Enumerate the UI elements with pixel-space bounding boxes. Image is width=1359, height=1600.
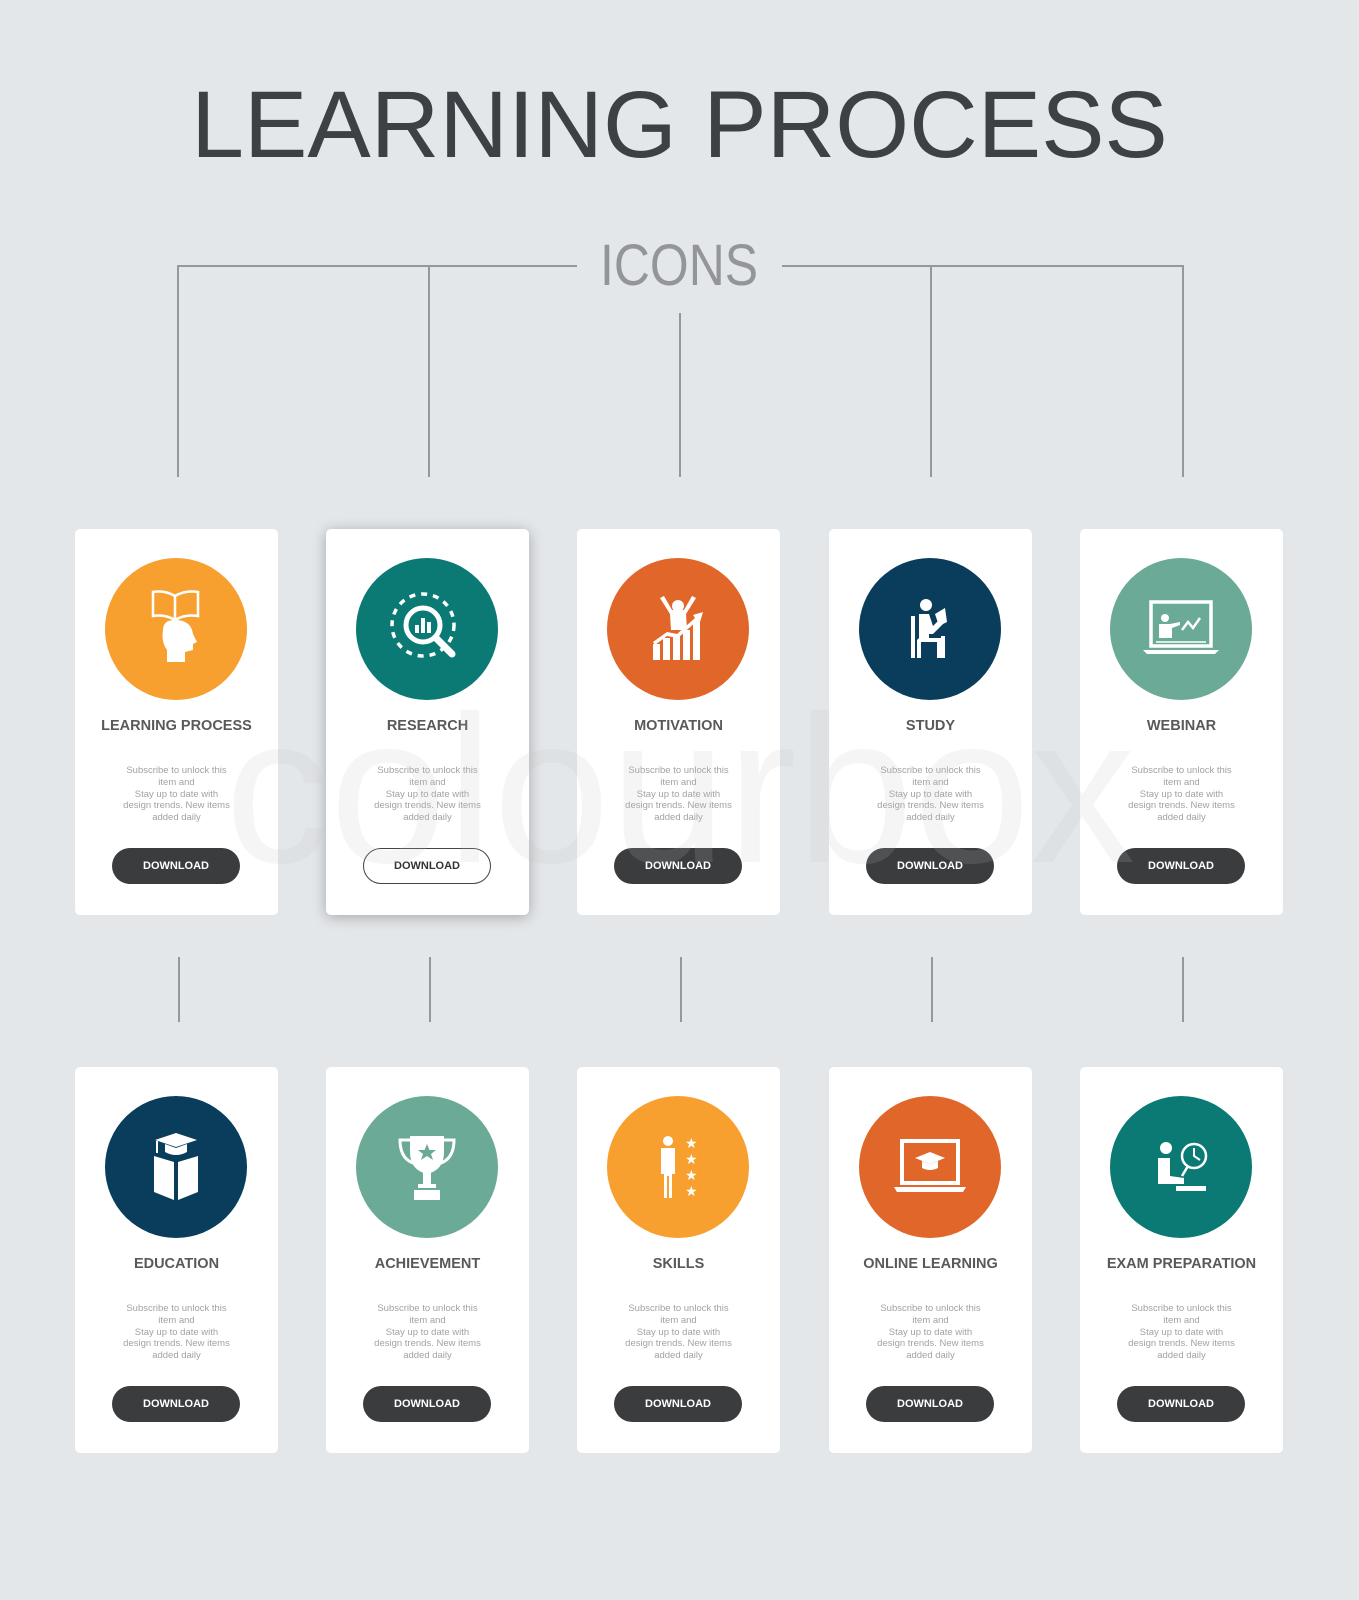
title: LEARNING PROCESS bbox=[191, 72, 1168, 178]
description: Subscribe to unlock this bbox=[1131, 1303, 1232, 1314]
icon: magnifier chart bbox=[356, 558, 498, 700]
card: exam preparation bbox=[1080, 1067, 1283, 1453]
button: DOWNLOAD bbox=[897, 1398, 963, 1410]
description: item and bbox=[660, 777, 697, 788]
card: research bbox=[326, 529, 529, 915]
description: design trends. New items bbox=[625, 1338, 732, 1349]
description: added daily bbox=[403, 1350, 452, 1361]
button bbox=[614, 848, 742, 884]
button bbox=[1117, 848, 1245, 884]
label: ACHIEVEMENT bbox=[375, 1256, 480, 1272]
button: DOWNLOAD bbox=[645, 1398, 711, 1410]
card: education bbox=[75, 1067, 278, 1453]
description bbox=[625, 1303, 732, 1361]
button bbox=[363, 1386, 491, 1422]
description: Stay up to date with bbox=[135, 789, 218, 800]
icon: person sitting reading bbox=[859, 558, 1001, 700]
card: online learning bbox=[829, 1067, 1032, 1453]
button bbox=[112, 848, 240, 884]
icon: book with graduation cap bbox=[105, 1096, 247, 1238]
description: item and bbox=[409, 1315, 446, 1326]
label: LEARNING PROCESS bbox=[101, 718, 252, 734]
description: design trends. New items bbox=[1128, 800, 1235, 811]
description: design trends. New items bbox=[625, 800, 732, 811]
label: WEBINAR bbox=[1147, 718, 1216, 734]
description: item and bbox=[1163, 777, 1200, 788]
button bbox=[866, 1386, 994, 1422]
label: EXAM PREPARATION bbox=[1107, 1256, 1256, 1272]
button: DOWNLOAD bbox=[897, 860, 963, 872]
description: Subscribe to unlock this bbox=[1131, 765, 1232, 776]
icon: laptop presentation bbox=[1110, 558, 1252, 700]
description: item and bbox=[1163, 1315, 1200, 1326]
description bbox=[123, 765, 230, 823]
description: item and bbox=[158, 777, 195, 788]
description: design trends. New items bbox=[123, 800, 230, 811]
button: DOWNLOAD bbox=[645, 860, 711, 872]
watermark: colourbox bbox=[225, 672, 1135, 907]
button bbox=[363, 848, 491, 884]
description: added daily bbox=[1157, 812, 1206, 823]
description: item and bbox=[660, 1315, 697, 1326]
card: webinar bbox=[1080, 529, 1283, 915]
description: Stay up to date with bbox=[637, 789, 720, 800]
description: Subscribe to unlock this bbox=[126, 1303, 227, 1314]
description: Stay up to date with bbox=[889, 1327, 972, 1338]
icon: head with book bbox=[105, 558, 247, 700]
button bbox=[614, 1386, 742, 1422]
description: design trends. New items bbox=[877, 1338, 984, 1349]
description: Stay up to date with bbox=[135, 1327, 218, 1338]
description bbox=[877, 1303, 984, 1361]
description bbox=[123, 1303, 230, 1361]
description bbox=[877, 765, 984, 823]
card: motivation bbox=[577, 529, 780, 915]
icon: person with growth chart bbox=[607, 558, 749, 700]
description bbox=[1128, 1303, 1235, 1361]
description: added daily bbox=[906, 1350, 955, 1361]
icon: person writing with clock bbox=[1110, 1096, 1252, 1238]
card: achievement bbox=[326, 1067, 529, 1453]
card: study bbox=[829, 529, 1032, 915]
description: Subscribe to unlock this bbox=[126, 765, 227, 776]
connector tree top bbox=[177, 265, 1184, 477]
description: item and bbox=[409, 777, 446, 788]
description: item and bbox=[912, 777, 949, 788]
description bbox=[625, 765, 732, 823]
description: Stay up to date with bbox=[386, 1327, 469, 1338]
description: added daily bbox=[654, 812, 703, 823]
description: design trends. New items bbox=[1128, 1338, 1235, 1349]
label: ONLINE LEARNING bbox=[863, 1256, 998, 1272]
description: Stay up to date with bbox=[1140, 789, 1223, 800]
icon: person with stars: ★ bbox=[685, 1168, 698, 1184]
description bbox=[374, 765, 481, 823]
icon: person with stars: ★ bbox=[685, 1184, 698, 1200]
description: design trends. New items bbox=[877, 800, 984, 811]
button bbox=[866, 848, 994, 884]
icon: person with stars: ★ bbox=[685, 1136, 698, 1152]
description: Stay up to date with bbox=[1140, 1327, 1223, 1338]
description: added daily bbox=[654, 1350, 703, 1361]
description: design trends. New items bbox=[374, 800, 481, 811]
label: EDUCATION bbox=[134, 1256, 219, 1272]
button: DOWNLOAD bbox=[143, 1398, 209, 1410]
description: Stay up to date with bbox=[889, 789, 972, 800]
icon: trophy bbox=[356, 1096, 498, 1238]
label: SKILLS bbox=[653, 1256, 704, 1272]
description: added daily bbox=[152, 812, 201, 823]
description: Subscribe to unlock this bbox=[377, 765, 478, 776]
description: Subscribe to unlock this bbox=[628, 765, 729, 776]
icon: person with stars: ★ bbox=[685, 1152, 698, 1168]
description: Stay up to date with bbox=[386, 789, 469, 800]
description: added daily bbox=[403, 812, 452, 823]
button bbox=[1117, 1386, 1245, 1422]
description: item and bbox=[912, 1315, 949, 1326]
connectors between rows bbox=[178, 957, 1184, 1022]
icon: person with stars bbox=[607, 1096, 749, 1238]
description: Subscribe to unlock this bbox=[880, 765, 981, 776]
icon: laptop with cap bbox=[859, 1096, 1001, 1238]
subtitle: icons: ICONS bbox=[600, 233, 758, 298]
description bbox=[1128, 765, 1235, 823]
button bbox=[112, 1386, 240, 1422]
description: design trends. New items bbox=[374, 1338, 481, 1349]
description bbox=[374, 1303, 481, 1361]
description: Subscribe to unlock this bbox=[880, 1303, 981, 1314]
label: MOTIVATION bbox=[634, 718, 723, 734]
description: added daily bbox=[152, 1350, 201, 1361]
label: RESEARCH bbox=[387, 718, 468, 734]
description: added daily bbox=[1157, 1350, 1206, 1361]
button: DOWNLOAD bbox=[394, 860, 460, 872]
description: Stay up to date with bbox=[637, 1327, 720, 1338]
button: DOWNLOAD bbox=[1148, 860, 1214, 872]
description: Subscribe to unlock this bbox=[628, 1303, 729, 1314]
description: design trends. New items bbox=[123, 1338, 230, 1349]
description: Subscribe to unlock this bbox=[377, 1303, 478, 1314]
description: added daily bbox=[906, 812, 955, 823]
card: skills bbox=[577, 1067, 780, 1453]
label: STUDY bbox=[906, 718, 955, 734]
button: DOWNLOAD bbox=[394, 1398, 460, 1410]
description: item and bbox=[158, 1315, 195, 1326]
card: learning process bbox=[75, 529, 278, 915]
button: DOWNLOAD bbox=[1148, 1398, 1214, 1410]
button: DOWNLOAD bbox=[143, 860, 209, 872]
